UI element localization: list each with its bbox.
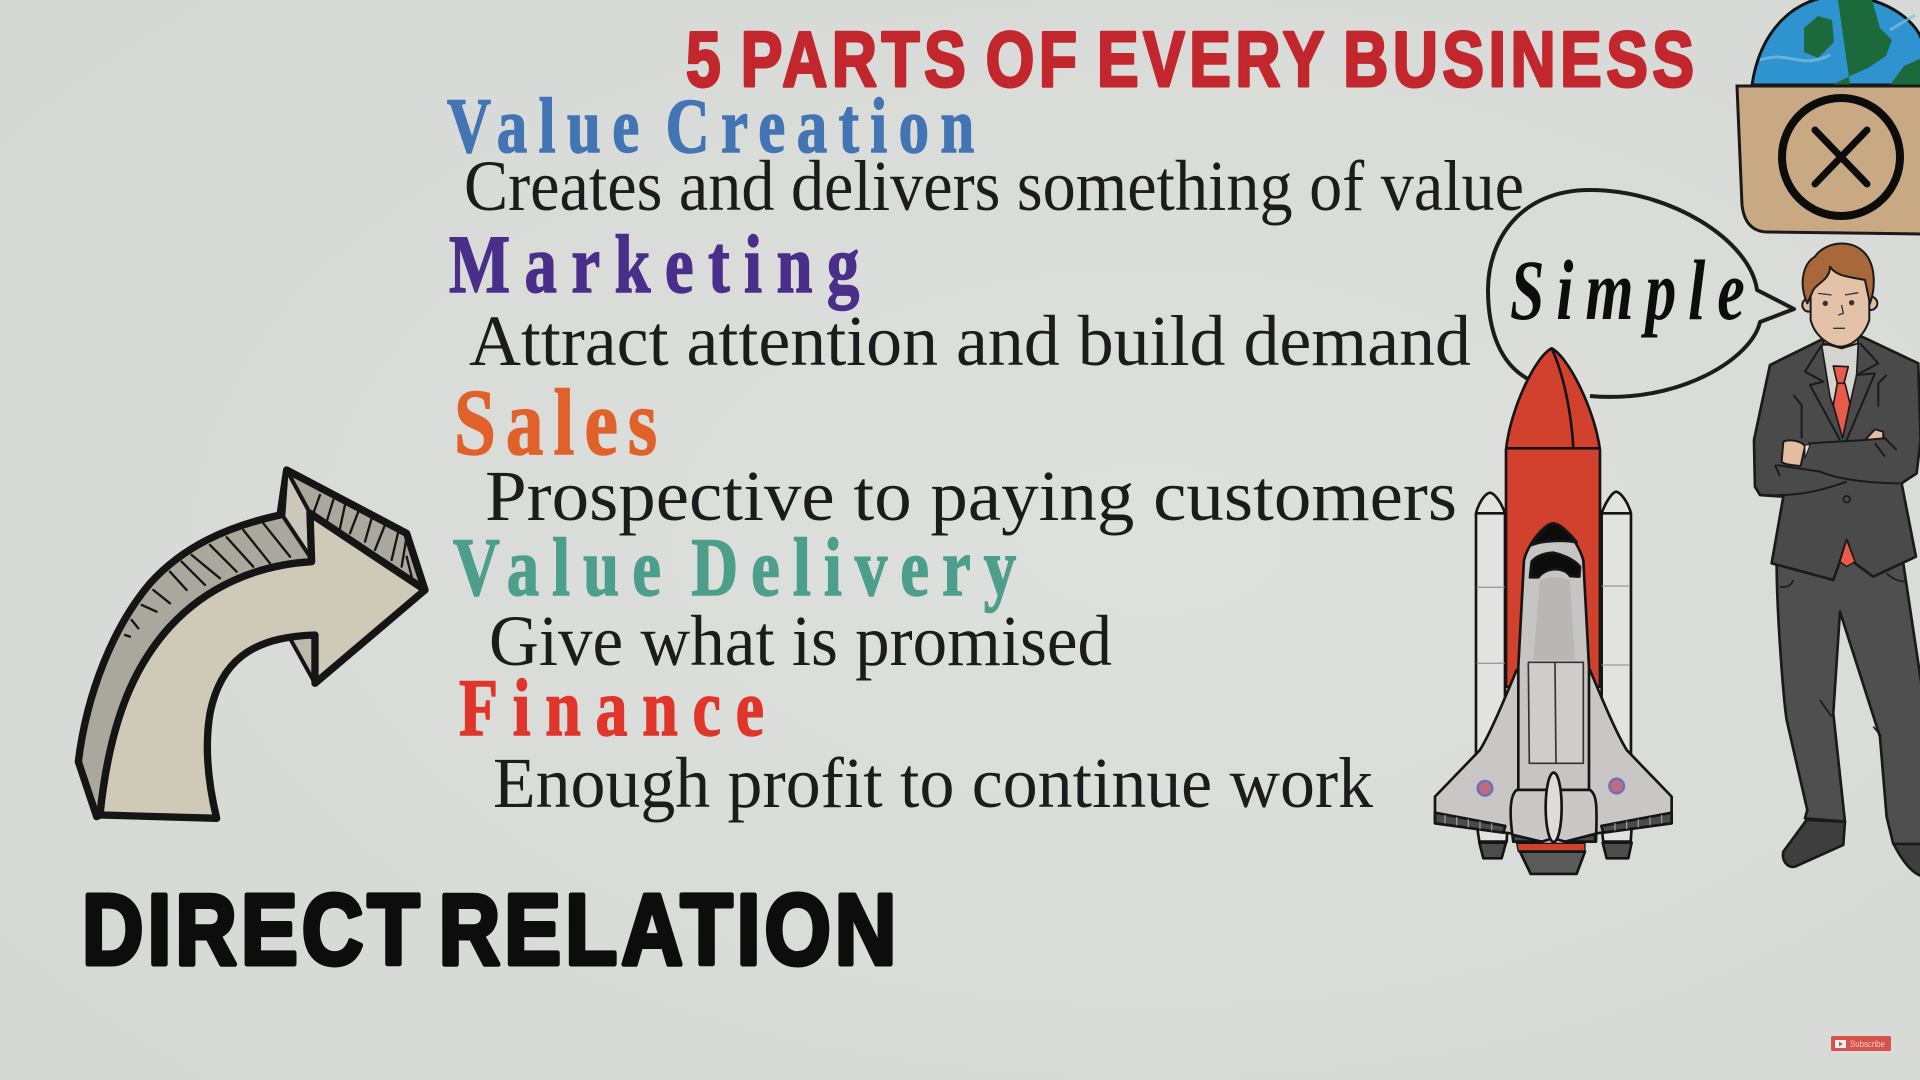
text: marketing description: Attract attention and build demand — [469, 301, 1471, 381]
right booster — [1602, 492, 1631, 753]
title: 5 PARTS OF EVERY BUSINESS — [686, 15, 1694, 103]
play icon — [1835, 1040, 1846, 1048]
jacket — [1754, 337, 1920, 580]
lapels — [1805, 343, 1878, 440]
tie end — [1840, 540, 1855, 567]
neck — [1823, 333, 1858, 348]
face — [1811, 260, 1869, 347]
heading: finance: Finance — [459, 661, 764, 753]
hair — [1803, 243, 1874, 303]
speech bubble — [1488, 190, 1794, 397]
heading: value creation: Value Creation — [447, 84, 974, 170]
left hand — [1782, 440, 1805, 466]
shirt — [1822, 343, 1858, 433]
crossed arm lines — [1760, 375, 1900, 495]
facial features — [1818, 293, 1858, 328]
box — [1737, 86, 1920, 234]
ears — [1802, 298, 1816, 312]
icon: globe in a box — [1737, 0, 1920, 234]
payload doors — [1528, 662, 1583, 763]
subscribe button — [1831, 1036, 1891, 1051]
heading: direct relation: DIRECT RELATION — [82, 873, 896, 986]
shirt cuff — [1805, 445, 1810, 458]
engine block — [1511, 790, 1597, 842]
cockpit window — [1530, 553, 1580, 577]
wings — [1435, 670, 1672, 833]
heading: sales: Sales — [454, 371, 657, 475]
icon: cross in circle — [1782, 98, 1900, 216]
tail — [1517, 843, 1585, 852]
heading: marketing: Marketing — [449, 220, 859, 311]
speech text: Simple — [1510, 243, 1745, 339]
illustration: space shuttle rocket — [1435, 348, 1672, 874]
right hand — [1865, 429, 1883, 440]
right shoe — [1893, 843, 1920, 877]
jacket button — [1843, 496, 1850, 503]
side nozzles — [1477, 828, 1507, 842]
icon: curved 3d arrow — [78, 470, 425, 818]
necktie — [1833, 366, 1850, 438]
globe — [1752, 0, 1920, 85]
red fuel tank — [1506, 348, 1600, 687]
trousers — [1777, 560, 1920, 844]
wing emblems — [1478, 779, 1624, 796]
text: value creation description: Creates and delivers something of value — [464, 146, 1524, 226]
text: sales description: Prospective to paying customers — [485, 456, 1457, 536]
orbiter body — [1518, 523, 1589, 790]
text: finance description: Enough profit to continue work — [493, 743, 1373, 823]
left shoe — [1783, 820, 1845, 867]
text: value delivery description: Give what is promised — [489, 601, 1112, 681]
heading: value delivery: Value Delivery — [453, 523, 1016, 614]
subscribe label: Subscribe — [1850, 1039, 1885, 1049]
illustration: businessman — [1754, 243, 1920, 877]
left booster — [1476, 493, 1505, 753]
